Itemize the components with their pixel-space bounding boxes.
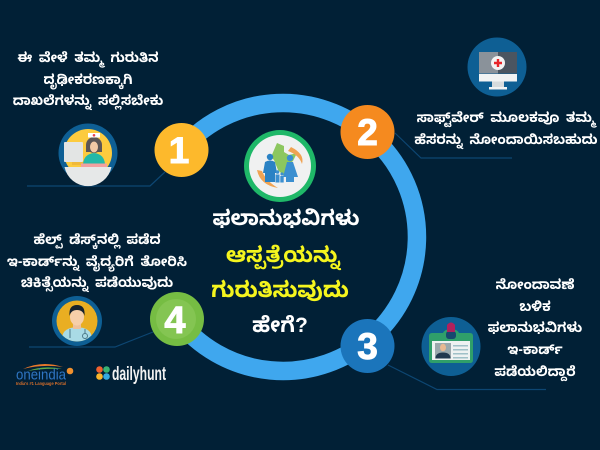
text block 1: ದಾಖಲೆಗಳನ್ನು ಸಲ್ಲಿಸಬೇಕು xyxy=(13,93,163,108)
leader line 3 xyxy=(388,365,546,390)
logo: oneindia: India's #1 Language Portal xyxy=(16,381,66,386)
text block 2: ಸಾಫ್ಟ್‌ವೇರ್ ಮೂಲಕವೂ ತಮ್ಮ xyxy=(417,110,595,125)
icon: doctor xyxy=(52,296,102,346)
text block 3: ಫಲಾನುಭವಿಗಳು xyxy=(488,320,582,335)
icon: nurse at desk xyxy=(58,124,118,186)
badge 3: 3 xyxy=(357,326,378,367)
logo: dailyhunt: dailyhunt xyxy=(112,364,166,385)
text block 1: ಈ ವೇಳೆ ತಮ್ಮ ಗುರುತಿನ xyxy=(18,50,158,65)
leader line 2 xyxy=(395,133,512,158)
badge 1 xyxy=(154,123,208,177)
badge 2: 2 xyxy=(357,112,378,153)
text block 4: ಚಿಕಿತ್ಸೆಯನ್ನು ಪಡೆಯುವುದು xyxy=(21,275,173,290)
icon: computer monitor xyxy=(468,38,526,96)
title line 3: ಗುರುತಿಸುವುದು xyxy=(211,277,349,302)
ring arc xyxy=(177,103,417,371)
badge 3 xyxy=(340,319,394,373)
logo: oneindia: oneindia xyxy=(16,366,67,384)
text block 3: ಪಡೆಯಲಿದ್ದಾರೆ xyxy=(494,364,576,379)
title line 1: ಫಲಾನುಭವಿಗಳು xyxy=(212,207,360,230)
text block 2 xyxy=(414,110,598,150)
badge 4: 4 xyxy=(164,300,186,342)
icon: centre emblem xyxy=(244,130,316,202)
text block 2: ಹೆಸರನ್ನು ನೋಂದಾಯಿಸಬಹುದು xyxy=(414,132,598,147)
text block 3: ಇ-ಕಾರ್ಡ್ xyxy=(507,342,563,357)
text block 4: ಇ-ಕಾರ್ಡ್‌ನ್ನು ವೈದ್ಯರಿಗೆ ತೋರಿಸಿ xyxy=(7,254,187,269)
text block 1: ದೃಢೀಕರಣಕ್ಕಾಗಿ xyxy=(44,72,132,87)
title line 2: ಆಸ್ಪತ್ರೆಯನ್ನು xyxy=(226,243,340,267)
text block 4 xyxy=(7,232,187,292)
text block 4: ಹೆಲ್ಪ್ ಡೆಸ್ಕ್‌ನಲ್ಲಿ ಪಡೆದ xyxy=(33,232,161,247)
badge 4 xyxy=(150,292,204,346)
icon: ID card xyxy=(422,317,480,376)
leader line 1 xyxy=(27,172,165,186)
title line 4: ಹೇಗೆ? xyxy=(252,314,308,337)
text block 1 xyxy=(13,50,163,110)
text block 3: ನೋಂದಾವಣೆ xyxy=(496,277,574,292)
text block 3 xyxy=(488,277,582,382)
text block 3: ಬಳಿಕ xyxy=(519,299,551,314)
logo: dailyhunt xyxy=(96,364,166,385)
badge 1: 1 xyxy=(169,130,189,171)
leader line 4 xyxy=(29,332,153,347)
badge 2 xyxy=(340,105,394,159)
